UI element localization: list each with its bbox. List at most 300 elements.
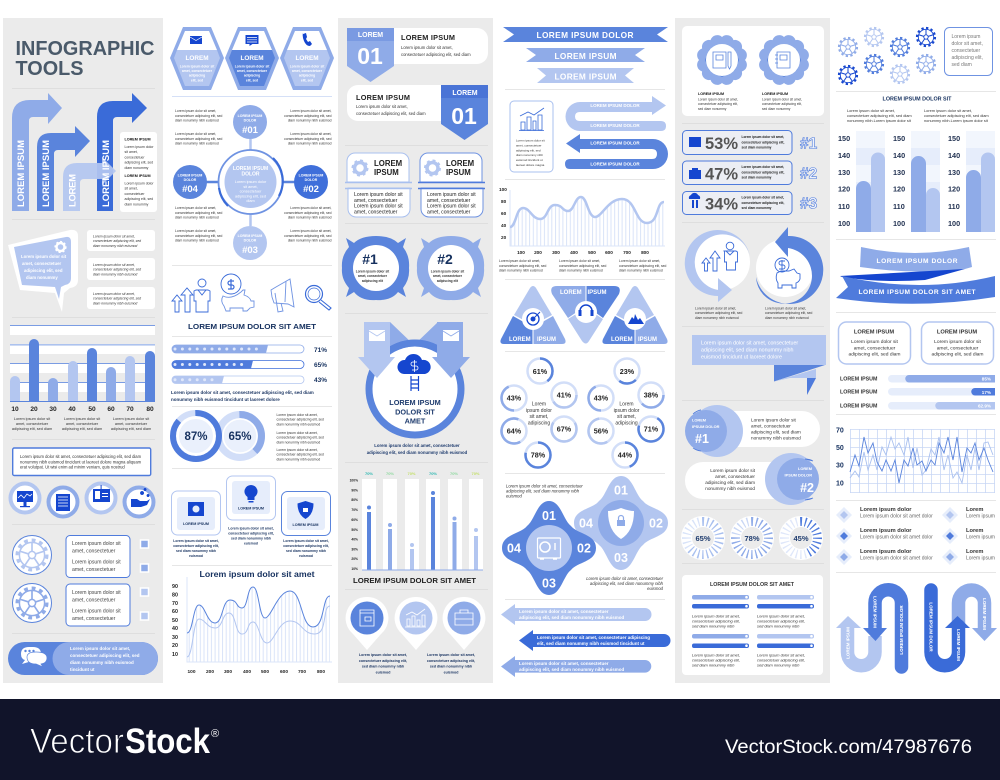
clover diagrams: 02 xyxy=(577,542,591,556)
arrows legend: diam nonummy xyxy=(124,166,149,170)
area line chart: 100 xyxy=(517,250,525,255)
ribbons: LOREM IPSUM xyxy=(554,72,617,82)
gear cards: amet, consectetuer xyxy=(354,198,398,204)
title: TOOLS xyxy=(16,58,84,80)
gear cards: Lorem ipsum dolor sit xyxy=(354,204,403,210)
u-turn arrows: LOREM IPSUM DOLOR xyxy=(590,123,640,128)
percentage rows: #2 xyxy=(800,166,817,182)
arrows chart: LOREM IPSUM xyxy=(41,140,52,207)
hub diagram: Lorem ipsum dolor sit amet, xyxy=(290,229,332,233)
hub diagram: consectetuer adipiscing elit, sed xyxy=(284,137,332,141)
folded banner: adipiscing elit, sed diam nonummy nibh xyxy=(701,348,794,354)
hub diagram: consectetuer adipiscing elit, sed xyxy=(175,137,223,141)
triple bar chart: 140 xyxy=(838,151,850,160)
bar chart: adipiscing elit, sed diam xyxy=(111,427,151,431)
left arrows: Lorem ipsum dolor sit amet, consectetuer xyxy=(519,609,609,614)
bar chart: 70 xyxy=(126,406,134,413)
text box: sed diam xyxy=(952,62,972,68)
hub diagram: Lorem ipsum dolor sit amet, xyxy=(290,206,332,210)
triple bar chart: 120 xyxy=(893,184,905,194)
triple bar chart: 100 xyxy=(948,219,960,228)
ring percentages: 64% xyxy=(507,426,522,436)
column chart: 70% xyxy=(351,508,358,512)
bar chart xyxy=(10,325,155,431)
diamond list: Lorem ipsum dolor xyxy=(860,507,912,513)
area line chart: diam nonummy nibh euismod xyxy=(559,269,603,273)
gear cards: Lorem ipsum dolor sit xyxy=(427,204,476,210)
gear cards: Lorem ipsum dolor sit xyxy=(354,192,403,198)
line chart: 800 xyxy=(317,669,325,675)
triple bar chart: 130 xyxy=(893,168,905,177)
map pins: euismod xyxy=(444,670,458,674)
bar chart: 60 xyxy=(107,406,115,413)
hexagons: Lorem ipsum dolor sit xyxy=(180,64,215,68)
clover diagrams: 04 xyxy=(579,516,593,530)
hub diagram: LOREM IPSUM xyxy=(238,114,262,118)
percentage rows: Lorem ipsum dolor sit amet, xyxy=(742,135,784,139)
tag cards: Lorem ipsum dolor sit amet, xyxy=(356,104,408,109)
icon cards: LOREM IPSUM xyxy=(238,506,264,510)
map pins: consectetuer adipiscing elit, xyxy=(359,659,407,663)
triple bar chart: 140 xyxy=(948,151,960,160)
gears and list: amet, consectetuer xyxy=(72,567,116,573)
numbered pills: #1 xyxy=(695,432,709,446)
heading: Lorem ipsum dolor sit amet xyxy=(200,569,315,579)
rank badges: Lorem ipsum dolor sit xyxy=(356,270,390,274)
icon cards: euismod xyxy=(244,542,258,546)
arrows legend: LOREM IPSUM xyxy=(124,174,151,178)
cloud emblem: Lorem ipsum dolor sit amet, consectetuer xyxy=(374,443,460,448)
area line chart: 200 xyxy=(534,250,542,255)
icon cards: Lorem ipsum dolor sit amet, xyxy=(228,526,274,530)
map pins: Lorem ipsum dolor sit amet, xyxy=(359,653,407,657)
diamond list: Lorem ipsum dolor sit amet dolor xyxy=(860,514,933,520)
ring percentages: 56% xyxy=(594,426,609,436)
diamond list: Lorem ipsum xyxy=(966,514,995,520)
ring percentages: 78% xyxy=(531,450,546,460)
snake arrows: LOREM IPSUM xyxy=(872,596,878,628)
numbered pills: LOREM xyxy=(692,418,706,422)
icon cards: consectetuer adipiscing elit, xyxy=(283,544,329,548)
text boxes: consectetuer adipiscing elit, sed xyxy=(93,239,141,243)
gear cards: LOREM xyxy=(374,159,402,168)
line chart: 90 xyxy=(172,584,178,590)
text boxes: diam nonummy nibh euismod xyxy=(93,244,137,248)
hub diagram: Lorem ipsum dolor xyxy=(235,180,267,184)
gears and list: Lorem ipsum dolor sit xyxy=(72,560,121,566)
triple bar chart: Lorem ipsum dolor sit amet, xyxy=(924,108,972,113)
clover diagrams: Lorem ipsum dolor sit amet, consectetuer xyxy=(586,576,664,581)
hexagons: Lorem ipsum dolor sit xyxy=(235,64,270,68)
donut charts: Lorem ipsum dolor sit amet, xyxy=(276,448,318,452)
column chart: 70% xyxy=(365,471,373,476)
panel: column two xyxy=(170,27,334,675)
curved ribbons xyxy=(836,247,995,304)
hexagons: LOREM xyxy=(185,55,209,62)
gears and list xyxy=(12,536,148,626)
footer bar: Vector xyxy=(30,722,124,761)
hub diagram: #02 xyxy=(303,184,319,195)
ring percentages: 44% xyxy=(618,450,633,460)
circular arrows: Lorem ipsum dolor sit amet, xyxy=(765,306,806,310)
percentage rows: #1 xyxy=(800,136,818,152)
gears and list: amet, consectetuer xyxy=(72,548,116,554)
cloud emblem xyxy=(358,322,470,455)
donut charts: consectetuer adipiscing elit, sed xyxy=(276,418,324,422)
speech bubble xyxy=(8,230,78,312)
text cards: amet, consectetuer xyxy=(937,345,979,351)
panel: column four xyxy=(497,27,670,677)
hub diagram: consectetuer adipiscing elit, sed xyxy=(284,114,332,118)
bar chart: 10 xyxy=(11,406,19,413)
progress bars xyxy=(171,345,327,402)
arrows legend: adipiscing elit, sed xyxy=(124,161,153,165)
book badges card: consectetuer adipiscing elit, xyxy=(762,102,802,106)
triangle trio: IPSUM xyxy=(588,290,607,296)
line chart: 600 xyxy=(280,669,288,675)
text box: dolor sit amet, xyxy=(952,41,983,47)
triangle trio: IPSUM xyxy=(537,337,556,343)
u-turn arrows: LOREM IPSUM DOLOR xyxy=(590,162,640,166)
gear cards: IPSUM xyxy=(374,168,399,177)
map pins: euismod xyxy=(376,670,390,674)
progress bars: Lorem ipsum dolor sit amet, consectetuer adipiscing elit, sed diam xyxy=(171,390,314,395)
chat pill: Lorem ipsum dolor sit amet, xyxy=(70,646,130,651)
line chart: 200 xyxy=(206,669,214,675)
icon cards: Lorem ipsum dolor sit amet, xyxy=(283,539,329,543)
area line chart: Lorem ipsum dolor sit amet, xyxy=(619,259,660,263)
arrows chart: LOREM IPSUM xyxy=(101,140,112,207)
chart card: Lorem ipsum dolor sit xyxy=(516,138,545,142)
circular arrows: consectetuer adipiscing elit, sed xyxy=(695,311,743,315)
hub diagram: Lorem ipsum dolor sit amet, xyxy=(175,206,216,210)
text box: consectetuer xyxy=(952,48,980,54)
text boxes: diam nonummy nibh euismod xyxy=(93,272,137,276)
ring percentages: adipiscing xyxy=(528,420,550,426)
percentage rows: 47% xyxy=(705,166,738,184)
area line chart: 80 xyxy=(501,199,507,204)
book badges card: LOREM IPSUM xyxy=(762,92,788,96)
ring percentages: Lorem xyxy=(532,402,546,408)
slider card: consectetuer adipiscing elit, xyxy=(757,658,805,663)
diamond list: Lorem xyxy=(966,549,983,555)
footer bar: Stock xyxy=(125,722,210,761)
horizontal bars: 62.9% xyxy=(978,404,991,408)
text cards: Lorem ipsum dolor sit xyxy=(851,339,899,345)
text cards: amet, consectetuer xyxy=(854,345,896,351)
ring percentages: ipsum dolor xyxy=(614,408,640,414)
ring percentages: 61% xyxy=(533,367,548,376)
clover diagrams: euismod xyxy=(647,586,664,591)
bar chart: adipiscing elit, sed diam xyxy=(12,427,52,431)
chart card: euismod tincidunt ut xyxy=(516,158,543,162)
hub diagram xyxy=(173,105,332,260)
cloud emblem: AMET xyxy=(405,417,426,426)
chart card: amet, consectetuer xyxy=(516,143,542,147)
hub diagram: sit amet, xyxy=(243,185,258,189)
area line chart: 800 xyxy=(641,250,649,255)
numbered pills: adipiscing elit, sed diam xyxy=(751,430,801,434)
percentage rows: Lorem ipsum dolor sit amet, xyxy=(742,165,784,169)
circular arrows: consectetuer adipiscing elit, sed xyxy=(765,311,813,315)
progress bars: nonummy nibh euismod tincidunt ut laoreet dolore xyxy=(171,397,280,402)
gears and list: amet, consectetuer xyxy=(72,598,116,604)
bar chart: 50 xyxy=(88,406,96,413)
triple bar chart: 110 xyxy=(838,202,850,211)
column chart: 70% xyxy=(471,471,480,476)
snake arrows: LOREM IPSUM DOLOR xyxy=(928,602,934,652)
percentage rows: consectetuer adipiscing elit, xyxy=(742,140,784,144)
hub diagram: Lorem ipsum dolor sit amet, xyxy=(175,229,216,233)
book badges card: LOREM IPSUM xyxy=(698,92,724,96)
bar chart: 20 xyxy=(30,406,38,413)
ring percentages: sit amet, xyxy=(617,414,636,420)
ring percentages: 67% xyxy=(557,424,572,434)
slider card: consectetuer adipiscing elit, xyxy=(692,619,740,624)
text cards: adipiscing elit, sed diam xyxy=(849,352,900,358)
hub diagram: consectetuer adipiscing elit, sed xyxy=(284,234,332,238)
hub diagram: diam nonummy nibh euismod xyxy=(288,216,332,220)
numbered pills: LOREM xyxy=(798,466,812,471)
hub diagram: consectetuer xyxy=(240,190,262,194)
chat pill: tincidunt ut xyxy=(70,667,95,672)
column chart: 60% xyxy=(351,518,358,522)
progress bars: 43% xyxy=(314,377,327,384)
tag cards: LOREM IPSUM xyxy=(356,93,410,102)
ring percentages: 23% xyxy=(620,367,635,376)
donut charts: Lorem ipsum dolor sit amet, xyxy=(276,413,318,417)
triple bar chart xyxy=(838,96,995,232)
ribbons: LOREM IPSUM xyxy=(554,51,617,61)
clover diagrams xyxy=(502,476,668,595)
hub diagram: DOLOR xyxy=(244,118,257,122)
triangle trio: LOREM xyxy=(560,290,582,296)
hexagons: adipiscing xyxy=(244,74,260,78)
column chart: 100% xyxy=(350,478,358,482)
panel: column one xyxy=(8,38,158,675)
numbered pills: nonummy nibh euismod xyxy=(705,486,755,491)
hub diagram: adipiscing elit, sed xyxy=(235,194,266,198)
percentage rows: consectetuer adipiscing elit, xyxy=(742,201,784,205)
percentage rows: 53% xyxy=(705,135,738,153)
cloud emblem: adipiscing elit, sed diam nonummy nibh euismod xyxy=(367,450,468,455)
icon cards: euismod xyxy=(299,554,313,558)
ring percentages: 38% xyxy=(644,390,659,400)
icon cards: consectetuer adipiscing elit, xyxy=(228,532,274,536)
speech bubble: diam nonummy xyxy=(26,275,58,280)
tag cards: LOREM IPSUM xyxy=(401,33,455,42)
bar chart: 40 xyxy=(68,406,76,413)
left arrows: adipiscing elit, sed diam nonummy nibh euismod xyxy=(519,667,625,672)
clover diagrams: 01 xyxy=(542,509,556,523)
hub diagram: diam nonummy nibh euismod xyxy=(288,142,332,146)
chart card: laoreet dolore magna xyxy=(516,163,545,167)
hub diagram: consectetuer adipiscing elit, sed xyxy=(284,211,332,215)
area line chart: Lorem ipsum dolor sit amet, xyxy=(499,259,540,263)
area line chart: 100 xyxy=(499,187,507,192)
hexagons: amet, consectetuer xyxy=(292,69,323,73)
slider card: Lorem ipsum dolor sit amet, xyxy=(692,614,740,618)
area line chart: 300 xyxy=(552,250,560,255)
percentage rows: sed diam nonummy xyxy=(742,206,772,210)
left arrows: elit, sed diam nonummy nibh euismod tincidunt ut xyxy=(537,641,645,646)
bar chart: amet, consectetuer xyxy=(66,422,99,426)
triple bar chart: 120 xyxy=(838,184,850,194)
u-turn arrows xyxy=(565,96,668,169)
speech bubble: Lorem ipsum dolor sit xyxy=(21,254,67,259)
tag cards: LOREM xyxy=(358,32,383,39)
triangle trio xyxy=(500,286,668,344)
hexagons: elit, sed xyxy=(246,78,258,82)
rank badges xyxy=(342,236,484,300)
horizontal bars: LOREM IPSUM xyxy=(840,376,878,382)
book badges card: sed diam nonummy xyxy=(698,107,727,111)
hub diagram: #04 xyxy=(182,184,199,195)
donut charts: consectetuer adipiscing elit, sed xyxy=(276,453,324,457)
sunburst gauges: 45% xyxy=(793,534,809,543)
arrows legend: Lorem ipsum dolor xyxy=(124,182,154,186)
column chart: LOREM IPSUM DOLOR SIT AMET xyxy=(353,576,477,585)
line chart: 70 xyxy=(172,601,178,607)
numbered pills xyxy=(685,405,820,505)
circular arrows: diam nonummy nibh euismod xyxy=(695,316,739,320)
hub diagram: Lorem ipsum dolor sit amet, xyxy=(175,109,216,113)
book badges card: sed diam nonummy xyxy=(762,107,791,111)
horizontal bars: 85% xyxy=(982,376,991,382)
ring percentages: adipiscing xyxy=(615,420,638,426)
progress bars: 65% xyxy=(314,362,327,369)
bar chart: amet, consectetuer xyxy=(115,422,148,426)
hub diagram: diam nonummy nibh euismod xyxy=(288,119,332,123)
hub diagram: Lorem ipsum dolor sit amet, xyxy=(175,132,216,136)
title xyxy=(16,38,154,80)
area line chart: Lorem ipsum dolor sit amet, xyxy=(559,259,600,263)
numbered pills: IPSUM DOLOR xyxy=(692,424,720,429)
line chart: 50 xyxy=(172,618,178,624)
clover diagrams: euismod xyxy=(506,494,522,498)
hub diagram: DOLOR xyxy=(305,178,318,182)
arrows legend: sit amet, xyxy=(124,150,138,154)
icon cards: euismod xyxy=(189,554,203,558)
triple bar chart: 140 xyxy=(893,151,905,160)
text cards: Lorem ipsum dolor sit xyxy=(934,339,982,345)
hub diagram: Lorem ipsum dolor sit amet, xyxy=(290,109,332,113)
hexagons: elit, sed xyxy=(191,78,203,82)
sunburst gauges: 65% xyxy=(695,534,711,543)
horizontal bars: 17% xyxy=(982,390,991,395)
clover diagrams: 01 xyxy=(614,484,628,498)
hub diagram: LOREM IPSUM xyxy=(238,234,262,238)
footer bar: VectorStock.com/47987676 xyxy=(725,737,972,758)
panel: column six xyxy=(836,28,997,667)
u-turn arrows: LOREM IPSUM DOLOR xyxy=(590,140,640,146)
numbered pills: amet, consectetuer xyxy=(751,424,791,428)
gear cards: amet, consectetuer xyxy=(427,209,471,215)
column chart: 90% xyxy=(351,488,358,492)
sunburst gauges xyxy=(686,521,818,555)
hub diagram: diam nonummy nibh euismod xyxy=(175,142,219,146)
column chart: 10% xyxy=(351,567,358,571)
horizontal bars: LOREM IPSUM xyxy=(840,390,878,396)
percentage rows: sed diam nonummy xyxy=(742,146,772,150)
ribbons xyxy=(503,27,668,83)
text boxes: consectetuer adipiscing elit, sed xyxy=(93,268,141,272)
area line chart: diam nonummy nibh euismod xyxy=(619,269,663,273)
horizontal bars: LOREM IPSUM xyxy=(840,404,878,410)
icon cards: LOREM IPSUM xyxy=(183,522,209,526)
title: INFOGRAPHIC xyxy=(16,38,154,60)
tag cards: 01 xyxy=(357,43,383,69)
column chart xyxy=(350,471,483,585)
snake arrows: LOREM IPSUM DOLOR xyxy=(899,605,904,655)
hub diagram: diam nonummy nibh euismod xyxy=(175,216,219,220)
triple bar chart: LOREM IPSUM DOLOR SIT xyxy=(883,96,952,102)
tag cards: Lorem ipsum dolor sit amet, xyxy=(401,45,453,50)
line chart: 300 xyxy=(224,669,232,675)
hexagons: Lorem ipsum dolor sit xyxy=(290,64,325,68)
ring percentages: ipsum dolor xyxy=(526,408,552,414)
hub diagram: #01 xyxy=(242,125,259,136)
column chart: 20% xyxy=(351,557,358,561)
line chart: 80 xyxy=(172,592,178,598)
zigzag line chart: 10 xyxy=(836,480,844,488)
bar chart: Lorem ipsum dolor sit xyxy=(113,417,150,421)
hub diagram: consectetuer adipiscing elit, sed xyxy=(175,211,223,215)
icon cards: LOREM IPSUM xyxy=(292,523,319,527)
clover diagrams: 03 xyxy=(542,576,556,590)
text box: Lorem ipsum xyxy=(952,34,980,40)
area line chart xyxy=(499,187,667,273)
text boxes: Lorem ipsum dolor sit amet, xyxy=(93,234,135,238)
area line chart: 20 xyxy=(501,235,507,240)
triple bar chart: 100 xyxy=(838,219,850,228)
folded banner xyxy=(692,335,826,395)
heading: LOREM IPSUM DOLOR SIT AMET xyxy=(188,322,317,331)
curved ribbons: LOREM IPSUM DOLOR SIT AMET xyxy=(858,289,976,296)
triple bar chart: 130 xyxy=(838,168,850,177)
triple bar chart: Lorem ipsum dolor sit amet, xyxy=(847,108,895,113)
diamond list: Lorem ipsum xyxy=(966,534,995,540)
hexagons: elit, sed xyxy=(301,78,313,82)
hub diagram: DOLOR xyxy=(184,178,197,182)
circular arrows: diam nonummy nibh euismod xyxy=(765,316,809,320)
bar chart: amet, consectetuer xyxy=(16,422,49,426)
map pins: sed diam nonummy nibh xyxy=(362,665,404,669)
book badges card xyxy=(682,26,824,116)
column chart: 80% xyxy=(351,498,358,502)
bar chart: Lorem ipsum dolor sit xyxy=(64,417,101,421)
line chart xyxy=(172,577,332,675)
ring percentages xyxy=(497,353,668,468)
slider card: consectetuer adipiscing elit, xyxy=(692,658,740,663)
text callout: erat volutpat. Ut wisi enim ad minim veniam, quis nostrud xyxy=(20,465,125,470)
hub diagram: DOLOR xyxy=(241,172,260,178)
arrows chart xyxy=(12,93,147,211)
hub diagram: Lorem ipsum dolor sit amet, xyxy=(290,132,332,136)
triple bar chart: 120 xyxy=(948,184,960,194)
diamond list: Lorem xyxy=(966,507,983,513)
clover diagrams: 04 xyxy=(507,542,521,556)
chat pill xyxy=(8,642,158,675)
triple bar chart: 100 xyxy=(893,219,905,228)
rank badges: amet, consectetuer xyxy=(358,274,388,278)
numbered pills: #2 xyxy=(800,481,814,495)
donut charts xyxy=(173,413,324,461)
footer bar xyxy=(0,699,1000,780)
donut charts: 87% xyxy=(184,431,208,443)
map pins xyxy=(346,597,485,674)
rank badges: #1 xyxy=(362,251,378,267)
